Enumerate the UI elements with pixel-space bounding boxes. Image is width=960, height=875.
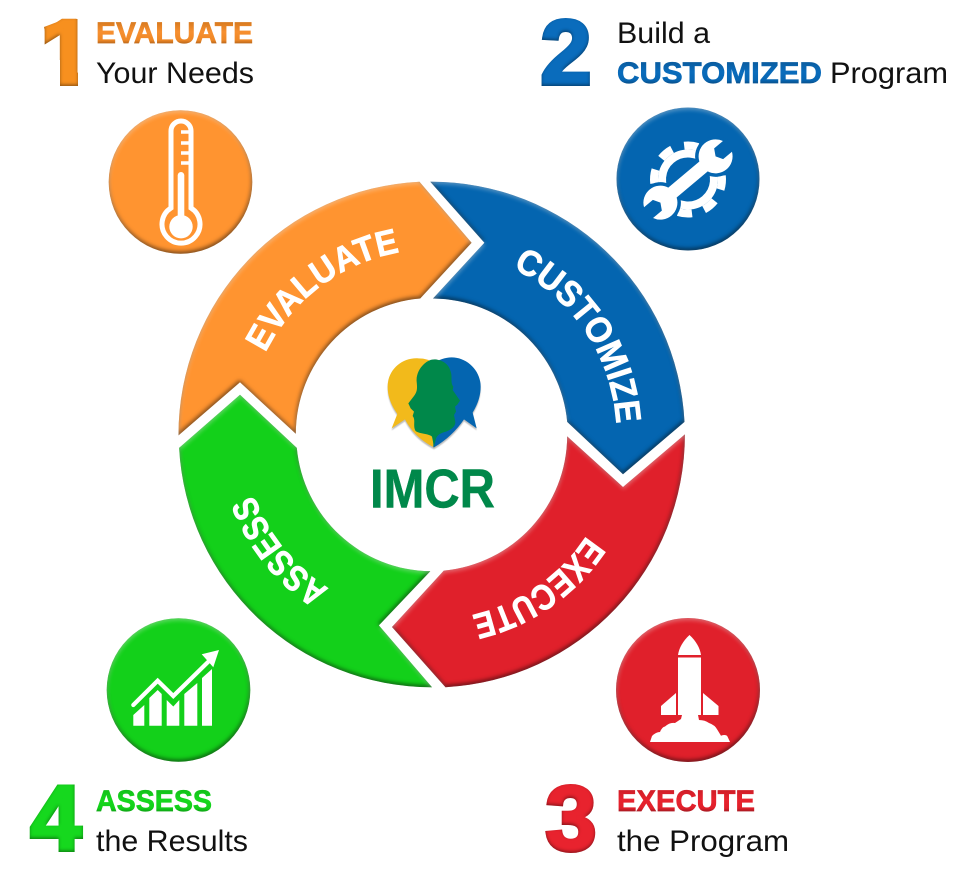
icon: rocket badge xyxy=(616,618,760,762)
number 4: 4 xyxy=(30,768,82,870)
step 4 heading xyxy=(30,768,248,870)
arrow segment: customize xyxy=(430,182,684,474)
Program label: Program xyxy=(830,57,948,90)
arrow segment: evaluate: EVALUATE xyxy=(244,228,399,352)
number 3: 3 xyxy=(545,768,597,870)
number 1: 1 xyxy=(40,2,92,104)
arrow segment: customize: CUSTOMIZE xyxy=(518,250,642,423)
arrow segment: evaluate xyxy=(178,182,472,436)
arrow segment: assess xyxy=(179,394,432,688)
icon: thermometer badge xyxy=(109,110,252,254)
the Results label: the Results xyxy=(96,825,248,858)
CUSTOMIZED label: CUSTOMIZED xyxy=(617,57,822,90)
icon: wrench and gear badge xyxy=(616,108,760,250)
number 2: 2 xyxy=(540,2,592,104)
EXECUTE label: EXECUTE xyxy=(617,785,755,818)
the Program label: the Program xyxy=(617,825,789,858)
logo mark: overlapping heads xyxy=(388,357,481,449)
logo wordmark: IMCR xyxy=(370,458,495,520)
step 1 heading xyxy=(44,18,253,86)
ASSESS label: ASSESS xyxy=(96,785,212,818)
cycle ring xyxy=(178,182,685,688)
Your Needs label: Your Needs xyxy=(96,57,254,90)
step 3 heading xyxy=(545,768,789,870)
center logo xyxy=(370,357,495,520)
arrow segment: assess: ASSESS xyxy=(232,498,329,604)
step 2 heading xyxy=(540,2,948,104)
number 1 xyxy=(44,18,78,86)
arrow segment: execute: EXECUTE xyxy=(472,537,606,640)
Build a label: Build a xyxy=(617,17,710,50)
arrow segment: execute xyxy=(392,434,685,688)
EVALUATE label: EVALUATE xyxy=(96,17,253,50)
icon: growth chart badge xyxy=(107,618,250,762)
